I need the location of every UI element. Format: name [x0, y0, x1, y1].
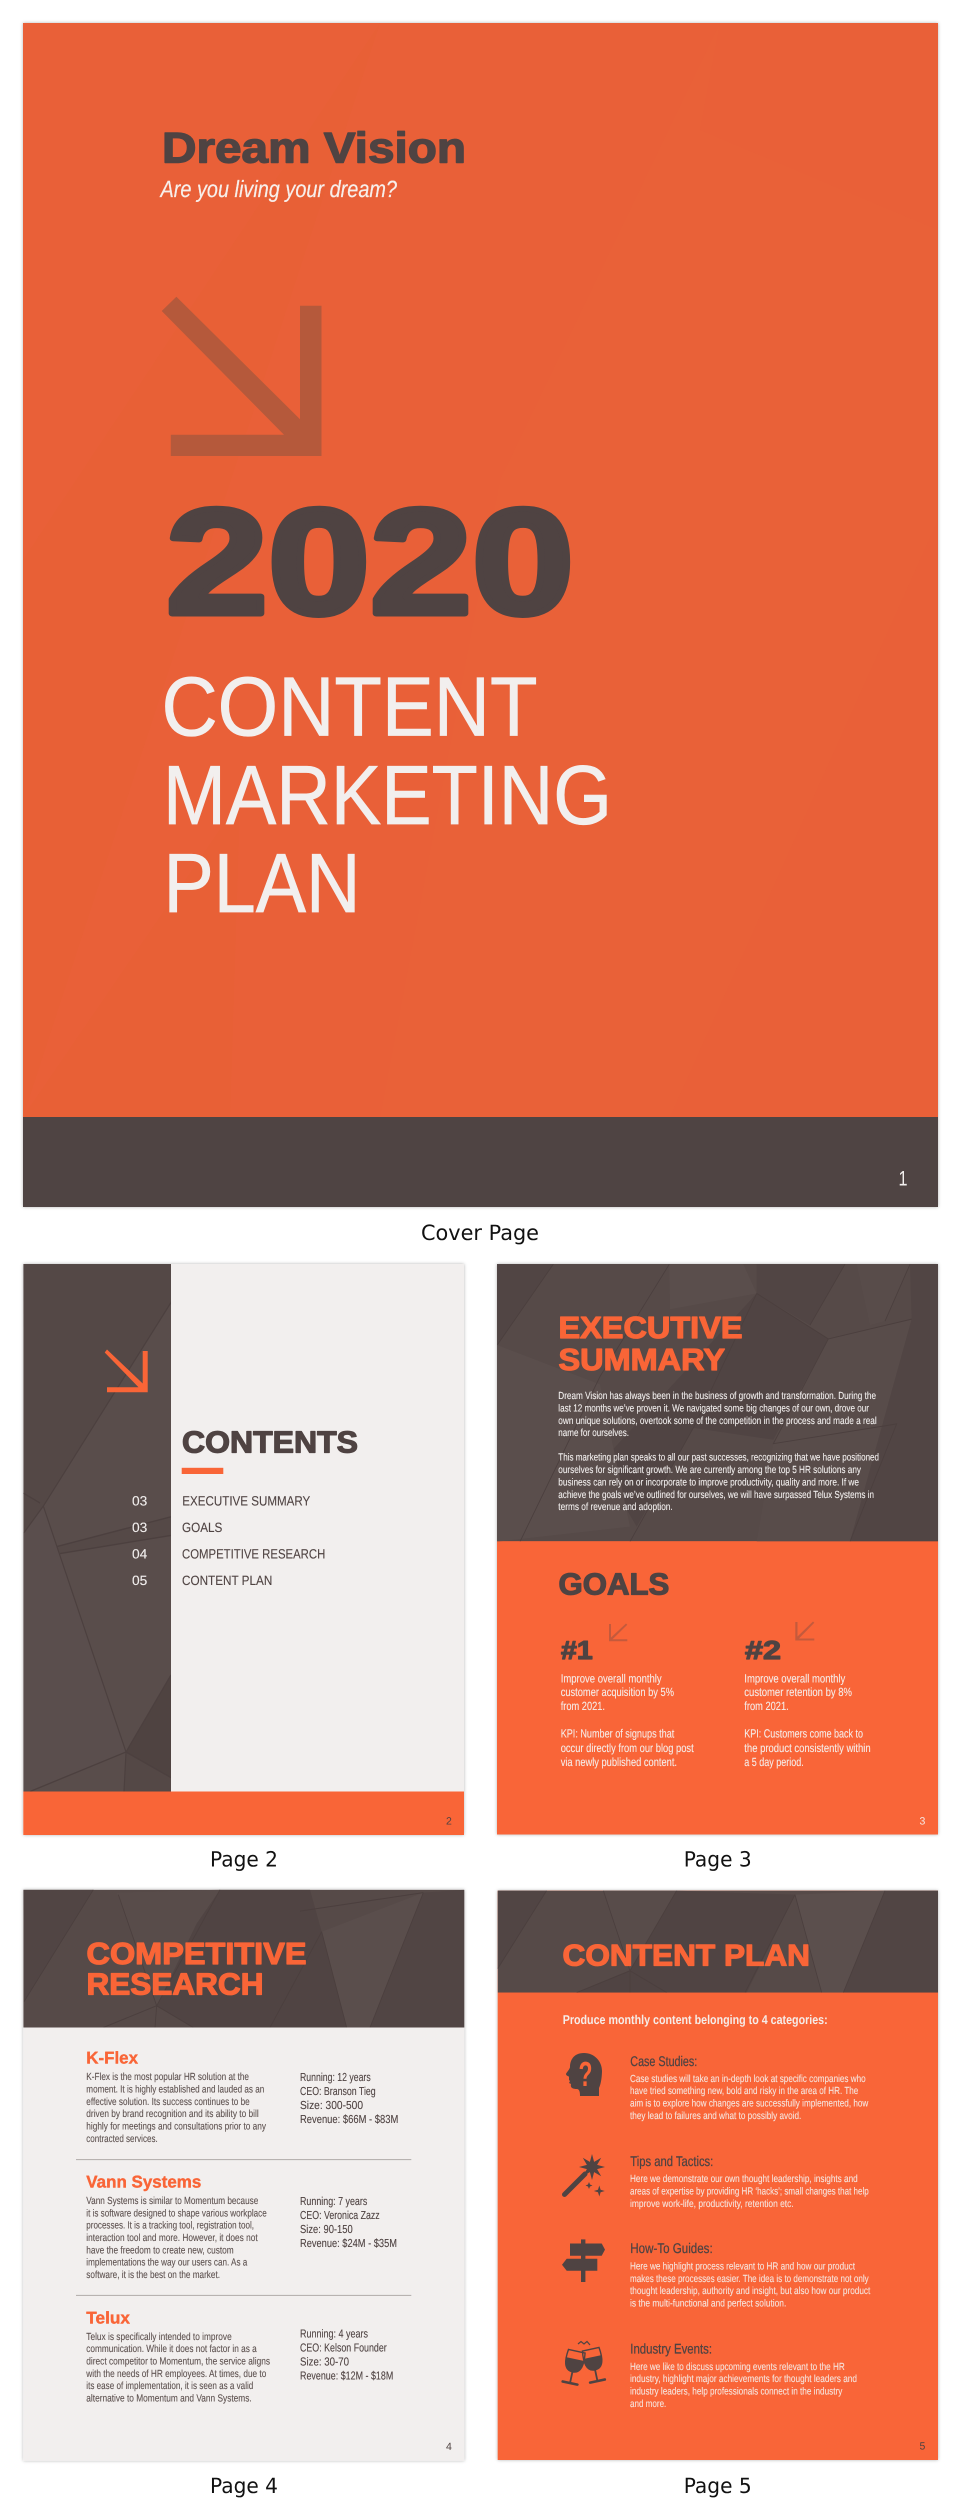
competitor: Telux: CEO: Kelson Founder [300, 2341, 387, 2354]
competitor: Telux: its ease of implementation, it is seen as a valid [86, 2381, 254, 2392]
competitor: K-Flex: K-Flex [86, 2049, 139, 2068]
competitor: K-Flex [86, 2049, 398, 2145]
contents list: COMPETITIVE RESEARCH [182, 1547, 325, 1562]
goal 1: via newly published content. [561, 1755, 677, 1769]
category: how-to guides: makes these processes easier. The idea is to demonstrate not only [630, 2274, 869, 2285]
panel: cover page [23, 23, 938, 1207]
heading: competitive research [86, 1937, 306, 2002]
competitor: K-Flex: K-Flex is the most popular HR solution at the [86, 2072, 249, 2083]
heading: content plan: CONTENT PLAN [562, 1939, 810, 1972]
page number: 4 [446, 2441, 452, 2453]
icon: goal 2 arrow [795, 1622, 814, 1640]
brand name: Dream Vision [162, 124, 466, 172]
icon: large arrow [162, 297, 322, 456]
competitor: Vann Systems: processes. It is a tracking tool, registration tool, [86, 2221, 254, 2232]
goal 2: from 2021. [744, 1699, 789, 1713]
competitor: K-Flex: Revenue: $66M - $83M [300, 2113, 398, 2126]
contents list: 04 [132, 1547, 148, 1562]
contents list [132, 1494, 325, 1588]
goal 1: occur directly from our blog post [561, 1741, 694, 1755]
competitor: Telux: Running: 4 years [300, 2327, 368, 2340]
executive summary text: last 12 months we’ve proven it. We navigated some big changes of our own, drove our [558, 1403, 869, 1414]
category: tips and tactics: areas of expertise by providing HR ‘hacks’; small changes that help [630, 2187, 869, 2198]
executive summary text: achieve the goals we’ve outlined for ourselves, we will have surpassed Telux Systems in [558, 1490, 874, 1501]
caption: cover page: Cover Page [421, 1221, 539, 1245]
competitor: K-Flex: Running: 12 years [300, 2071, 371, 2084]
competitor: Telux [85, 2308, 393, 2404]
competitor: K-Flex: effective solution. Its success continues to be [86, 2097, 250, 2108]
competitor: Telux: with the needs of HR employees. At times, due to [85, 2369, 267, 2380]
contents list: 03 [132, 1494, 147, 1509]
executive summary text [558, 1391, 879, 1513]
intro line: Produce monthly content belonging to 4 categories: [563, 2012, 828, 2027]
panel: page 3 executive summary and goals [497, 1264, 938, 1834]
panel: page 5 content plan [498, 1891, 938, 2460]
competitor: Vann Systems [86, 2173, 397, 2281]
category: tips and tactics: improve work-life, productivity, retention etc. [630, 2199, 794, 2210]
heading: executive summary: EXECUTIVE [558, 1311, 742, 1345]
caption: page 4: Page 4 [210, 2474, 278, 2498]
category: case studies: aim is to explore how changes are successfully implemented, how [630, 2098, 869, 2110]
competitor: K-Flex: Size: 300-500 [300, 2099, 363, 2112]
icon: clinking glasses [561, 2342, 607, 2385]
category: industry events: industry, highlight major achievements for thought leaders and [630, 2374, 857, 2385]
executive summary text: business can rely on or incorporate to improve productivity, quality and more. If we [558, 1478, 859, 1489]
goal 1: Improve overall monthly [561, 1671, 662, 1685]
category: industry events [630, 2340, 857, 2410]
title: MARKETING [163, 748, 612, 842]
competitor: K-Flex: highly for meetings and consultations prior to any [86, 2122, 267, 2133]
goal 1 [561, 1635, 694, 1769]
footer band [23, 1792, 464, 1835]
category: case studies [630, 2053, 869, 2122]
title: PLAN [164, 836, 360, 930]
executive summary text: ourselves for significant growth. We are currently among the top 5 HR solutions any [558, 1465, 862, 1476]
category: case studies: they lead to failures and what to possibly avoid. [630, 2111, 801, 2122]
competitor: K-Flex: moment. It is highly established and lauded as an [86, 2084, 265, 2096]
competitor: Telux: communication. While it does not factor in as a [86, 2344, 257, 2355]
competitor: Vann Systems: Running: 7 years [300, 2195, 367, 2208]
caption: page 5: Page 5 [684, 2474, 752, 2498]
page number: 5 [920, 2441, 926, 2453]
icon: head with question mark [566, 2053, 602, 2096]
panel: page 4 competitive research [23, 1890, 464, 2461]
goal 2: a 5 day period. [744, 1755, 804, 1769]
heading: competitive research: COMPETITIVE [86, 1937, 306, 1971]
competitor: Telux: alternative to Momentum and Vann Systems. [86, 2394, 252, 2404]
contents list: EXECUTIVE SUMMARY [182, 1494, 310, 1509]
heading: executive summary [558, 1311, 742, 1377]
competitor: Telux: direct competitor to Momentum, the service aligns [86, 2356, 270, 2367]
executive summary text: Dream Vision has always been in the business of growth and transformation. During the [558, 1391, 876, 1402]
competitor: Telux: Revenue: $12M - $18M [300, 2369, 393, 2382]
competitor: Vann Systems: have the freedom to create new, custom [86, 2245, 234, 2256]
executive summary text: own unique solutions, overtook some of the competition in the process and made a real [558, 1416, 877, 1427]
category: industry events: and more. [630, 2399, 666, 2410]
title [162, 660, 612, 930]
competitor: Vann Systems: software, it is the best on the market. [86, 2270, 220, 2281]
goal 2 [744, 1635, 871, 1769]
competitor: Vann Systems: Revenue: $24M - $35M [300, 2237, 397, 2250]
header with facets [23, 1890, 464, 2028]
icon: magic wand [564, 2154, 605, 2196]
caption: page 3: Page 3 [684, 1848, 752, 1872]
category: how-to guides [630, 2240, 870, 2309]
icon: orange arrow [105, 1350, 148, 1392]
page number: 1 [898, 1168, 908, 1190]
goal 2: customer retention by 8% [744, 1685, 852, 1699]
contents list: 03 [132, 1520, 147, 1535]
caption: page 2: Page 2 [210, 1848, 278, 1872]
executive summary text: terms of revenue and adoption. [558, 1502, 673, 1513]
goal 1: customer acquisition by 5% [561, 1685, 674, 1699]
icon: signpost [562, 2239, 605, 2282]
page number: 3 [920, 1815, 926, 1827]
icon: goal 1 arrow [609, 1624, 627, 1641]
category: how-to guides: is the multi-functional and perfect solution. [630, 2298, 786, 2309]
category: tips and tactics: Tips and Tactics: [630, 2153, 713, 2169]
panel: page 2 contents [23, 1264, 464, 1835]
icon: head with question mark: ? [578, 2055, 592, 2094]
category: case studies: have tried something new, bold and risky in the area of HR. The [630, 2086, 859, 2097]
goal 2: KPI: Customers come back to [744, 1727, 863, 1741]
executive summary text: name for ourselves. [558, 1428, 629, 1439]
competitor: Telux: Telux [86, 2308, 131, 2327]
heading: contents: CONTENTS [182, 1426, 358, 1460]
page number: 2 [446, 1816, 452, 1828]
competitor: Vann Systems: Vann Systems [86, 2173, 201, 2192]
competitor: Vann Systems: interaction tool and more. However, it does not [86, 2233, 258, 2244]
year: 2020 [166, 478, 574, 646]
competitor: Vann Systems: CEO: Veronica Zazz [300, 2209, 380, 2222]
goal 2: #2 [745, 1635, 781, 1665]
competitor: Vann Systems: Vann Systems is similar to Momentum because [86, 2196, 259, 2207]
title: CONTENT [162, 660, 538, 754]
tagline: Are you living your dream? [159, 176, 397, 202]
competitor: Telux: Telux is specifically intended to improve [86, 2332, 232, 2343]
category: industry events: Here we like to discuss upcoming events relevant to the HR [630, 2362, 845, 2373]
sidebar with facets [23, 1264, 172, 1792]
goal 1: from 2021. [561, 1699, 605, 1713]
goal 1: KPI: Number of signups that [561, 1727, 675, 1741]
header with facets [498, 1891, 938, 1993]
category: tips and tactics [630, 2153, 869, 2210]
competitor: K-Flex: driven by brand recognition and its ability to bill [86, 2109, 259, 2120]
competitor: Vann Systems: Size: 90-150 [300, 2223, 353, 2236]
goal 2: Improve overall monthly [744, 1671, 845, 1685]
contents list: CONTENT PLAN [182, 1573, 272, 1588]
category: industry events: industry leaders, help professionals connect in the industry [630, 2386, 843, 2398]
category: case studies: Case Studies: [630, 2053, 697, 2069]
competitor: K-Flex: contracted services. [86, 2134, 158, 2145]
category: how-to guides: thought leadership, authority and insight, but also how our product [630, 2286, 870, 2297]
goal 1: #1 [561, 1635, 593, 1665]
competitor: Telux: Size: 30-70 [300, 2355, 349, 2368]
heading: executive summary: SUMMARY [558, 1343, 725, 1377]
heading: competitive research: RESEARCH [86, 1968, 264, 2002]
category: case studies: Case studies will take an in-depth look at specific companies who [630, 2074, 866, 2085]
header with facets [497, 1264, 938, 1542]
accent bar [182, 1468, 223, 1474]
competitor: Vann Systems: it is software designed to shape various workplace [86, 2208, 267, 2219]
contents list: 05 [132, 1573, 147, 1588]
heading: goals: GOALS [558, 1568, 669, 1602]
category: industry events: Industry Events: [630, 2340, 712, 2356]
category: how-to guides: How-To Guides: [630, 2240, 713, 2256]
category: how-to guides: Here we highlight process relevant to HR and how our product [630, 2261, 855, 2272]
footer band [23, 1117, 938, 1207]
goal 2: the product consistently within [744, 1741, 871, 1755]
competitor: Vann Systems: implementations the way our users can. As a [86, 2258, 248, 2269]
contents list: GOALS [182, 1520, 222, 1535]
category: tips and tactics: Here we demonstrate our own thought leadership, insights and [630, 2174, 858, 2185]
executive summary text: This marketing plan speaks to all our past successes, recognizing that we have positioned [558, 1453, 879, 1464]
competitor: K-Flex: CEO: Branson Tieg [300, 2085, 376, 2098]
